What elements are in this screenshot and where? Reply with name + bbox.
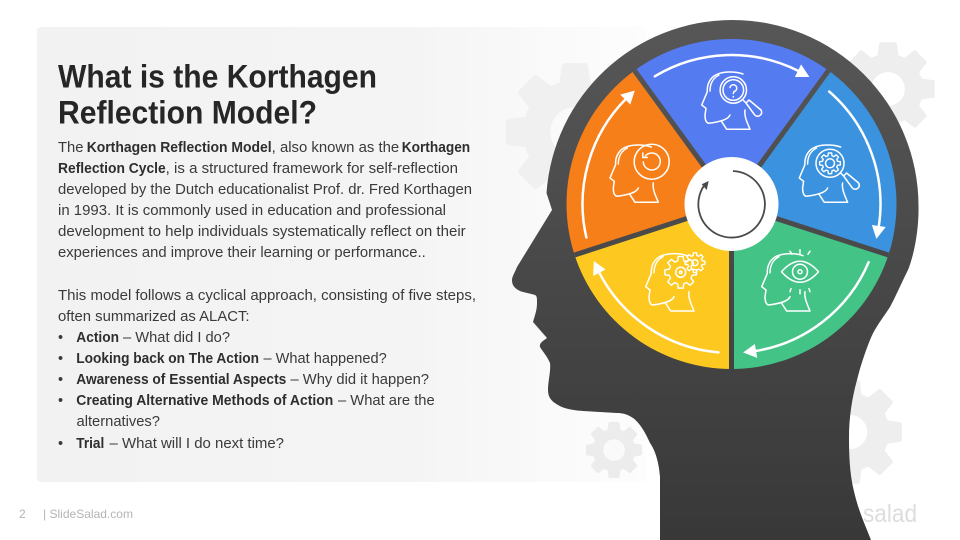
bullet list: five steps: • bbox=[58, 436, 63, 452]
bullet list: five steps: • bbox=[58, 351, 63, 367]
arrow: green sector bbox=[743, 262, 881, 370]
head silhouette bbox=[512, 20, 919, 540]
arrow: blue sector bbox=[655, 55, 809, 77]
icon: head with undo circle bbox=[610, 144, 669, 202]
text block: intro paragraph: in 1993. It is commonly used in education and professional bbox=[58, 203, 446, 219]
footer: page number and site: | SlideSalad.com bbox=[43, 507, 133, 521]
bullet list: five steps: Awareness of Essential Aspects bbox=[76, 372, 286, 388]
text block: ALACT introduction: often summarized as ALACT: bbox=[58, 309, 250, 325]
bullet list: five steps: – What are the bbox=[338, 393, 435, 409]
text block: intro paragraph: Korthagen bbox=[402, 140, 470, 156]
arrow: light blue sector bbox=[829, 85, 897, 239]
bullet list: five steps: Trial bbox=[76, 436, 104, 452]
bullet list: five steps bbox=[58, 330, 435, 452]
text block: intro paragraph: , is a structured framework for self-reflection bbox=[166, 161, 458, 177]
bullet list: five steps: – Why did it happen? bbox=[290, 372, 429, 388]
panel: text background bbox=[37, 27, 647, 482]
bullet list: five steps: • bbox=[58, 393, 63, 409]
text block: intro paragraph: The bbox=[58, 140, 84, 156]
bullet list: five steps: Creating Alternative Methods of Action bbox=[76, 393, 333, 409]
center hub with cycle arrow bbox=[684, 157, 778, 251]
arrow: orange sector bbox=[566, 84, 635, 238]
text block: intro paragraph: development to help individuals systematically reflect on their bbox=[58, 224, 466, 240]
background gear: upper left bbox=[509, 66, 641, 198]
background gear: small lower left bbox=[587, 423, 641, 477]
icon: head with question magnifier bbox=[702, 72, 762, 129]
icon: head with gear magnifier bbox=[799, 145, 859, 202]
bullet list: five steps: – What will I do next time? bbox=[110, 436, 284, 452]
text block: intro paragraph bbox=[58, 140, 472, 261]
text block: intro paragraph: developed by the Dutch educationalist Prof. dr. Fred Korthagen bbox=[58, 182, 472, 198]
bullet list: five steps: – What did I do? bbox=[123, 330, 230, 346]
bullet list: five steps: • bbox=[58, 330, 63, 346]
bullet list: five steps: alternatives? bbox=[76, 414, 160, 430]
text block: ALACT introduction: This model follows a cyclical approach, consisting of five steps, bbox=[58, 288, 476, 304]
wheel: five coloured sectors bbox=[567, 39, 896, 369]
text block: intro paragraph: Korthagen Reflection Model bbox=[87, 140, 272, 156]
text block: intro paragraph: Reflection Cycle bbox=[58, 161, 166, 177]
icon: head with eye bbox=[762, 250, 818, 311]
logo text: salad bbox=[863, 500, 917, 528]
sector: orange left bbox=[567, 70, 732, 255]
bullet list: five steps: • bbox=[58, 372, 63, 388]
text block: intro paragraph: experiences and improve their learning or performance.. bbox=[58, 245, 426, 261]
bullet list: five steps: Action bbox=[76, 330, 119, 346]
background gear: lower right bbox=[800, 382, 900, 482]
footer: page number and site: 2 bbox=[19, 507, 26, 521]
sector: light blue right bbox=[732, 70, 896, 255]
title: What is the Korthagen bbox=[58, 58, 377, 94]
arrow: yellow sector bbox=[581, 261, 719, 370]
sector: blue top bbox=[634, 39, 828, 204]
icon: head with gears bbox=[646, 253, 705, 311]
title: Reflection Model? bbox=[58, 94, 317, 130]
sector: yellow lower left bbox=[575, 204, 732, 369]
bullet list: five steps: Looking back on The Action bbox=[76, 351, 259, 367]
text block: intro paragraph: , also known as the bbox=[272, 140, 399, 156]
sector: green lower right bbox=[732, 204, 888, 369]
title bbox=[58, 58, 377, 130]
bullet list: five steps: – What happened? bbox=[264, 351, 387, 367]
text block: ALACT introduction bbox=[58, 288, 476, 325]
background gear: upper right bbox=[843, 44, 933, 134]
